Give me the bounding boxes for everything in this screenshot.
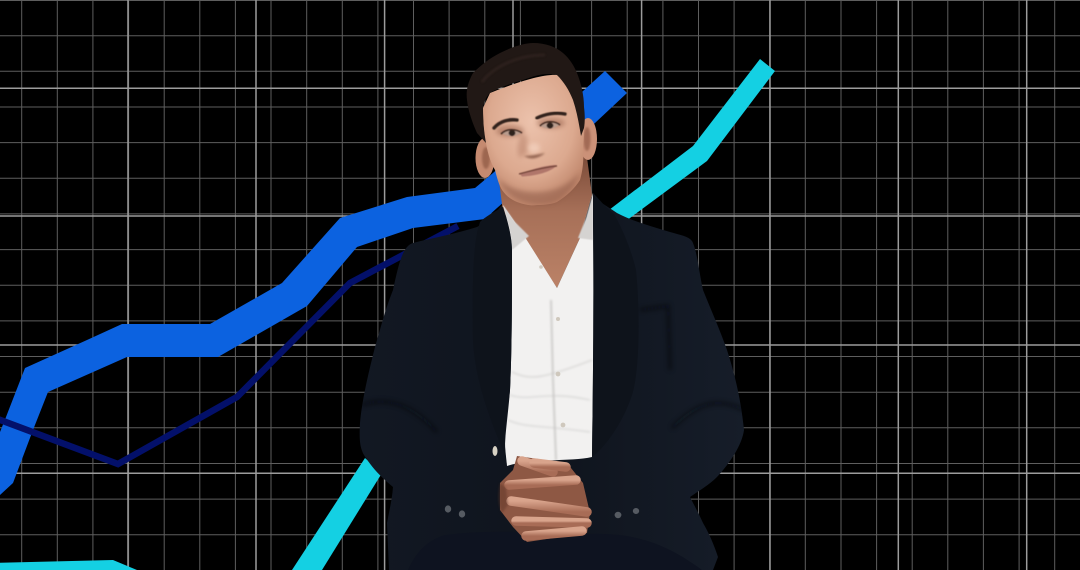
person: right ear bbox=[579, 118, 597, 160]
person: hand shadow bbox=[499, 483, 508, 513]
chart: navy line bbox=[0, 226, 458, 464]
person: right collar bbox=[578, 193, 593, 240]
person: neck bbox=[497, 150, 592, 288]
person: interlaced fingers bbox=[509, 461, 587, 536]
person: eye socket shadows bbox=[496, 118, 565, 137]
person: face bbox=[483, 75, 584, 205]
person: left eye bbox=[501, 130, 522, 136]
chart: cyan band, bottom-left segment bbox=[0, 560, 137, 570]
chart: rising blue band bbox=[0, 71, 627, 495]
person: left lapel bbox=[473, 207, 512, 466]
person: jacket body bbox=[360, 197, 744, 570]
chart: cyan rising band, upper segment bbox=[590, 59, 775, 240]
person: nose bbox=[518, 135, 545, 158]
person: shirt folds and placket bbox=[508, 300, 592, 460]
person: left eyebrow bbox=[494, 120, 517, 128]
person bbox=[360, 43, 744, 570]
person: stubble and jaw shadow bbox=[498, 172, 580, 204]
person: back of hands bbox=[500, 456, 590, 542]
person: mouth bbox=[519, 165, 557, 176]
person: hair highlights bbox=[482, 55, 545, 82]
chart: cyan rising band, lower segment bbox=[292, 458, 382, 570]
person: jacket sleeve shading bbox=[362, 306, 744, 432]
person: sleeve buttons bbox=[445, 505, 639, 518]
person: left ear bbox=[476, 138, 494, 178]
person: left collar bbox=[503, 205, 529, 250]
person: shirt buttons bbox=[539, 265, 565, 427]
person: trousers bbox=[408, 532, 702, 570]
person: right eye bbox=[540, 122, 560, 129]
person: right eyebrow bbox=[537, 113, 565, 118]
person: jacket button bbox=[492, 446, 498, 456]
person: hair bbox=[467, 43, 585, 143]
person: clasped hands bbox=[499, 456, 590, 542]
person: right lapel bbox=[592, 193, 639, 457]
person: white shirt bbox=[503, 193, 593, 466]
